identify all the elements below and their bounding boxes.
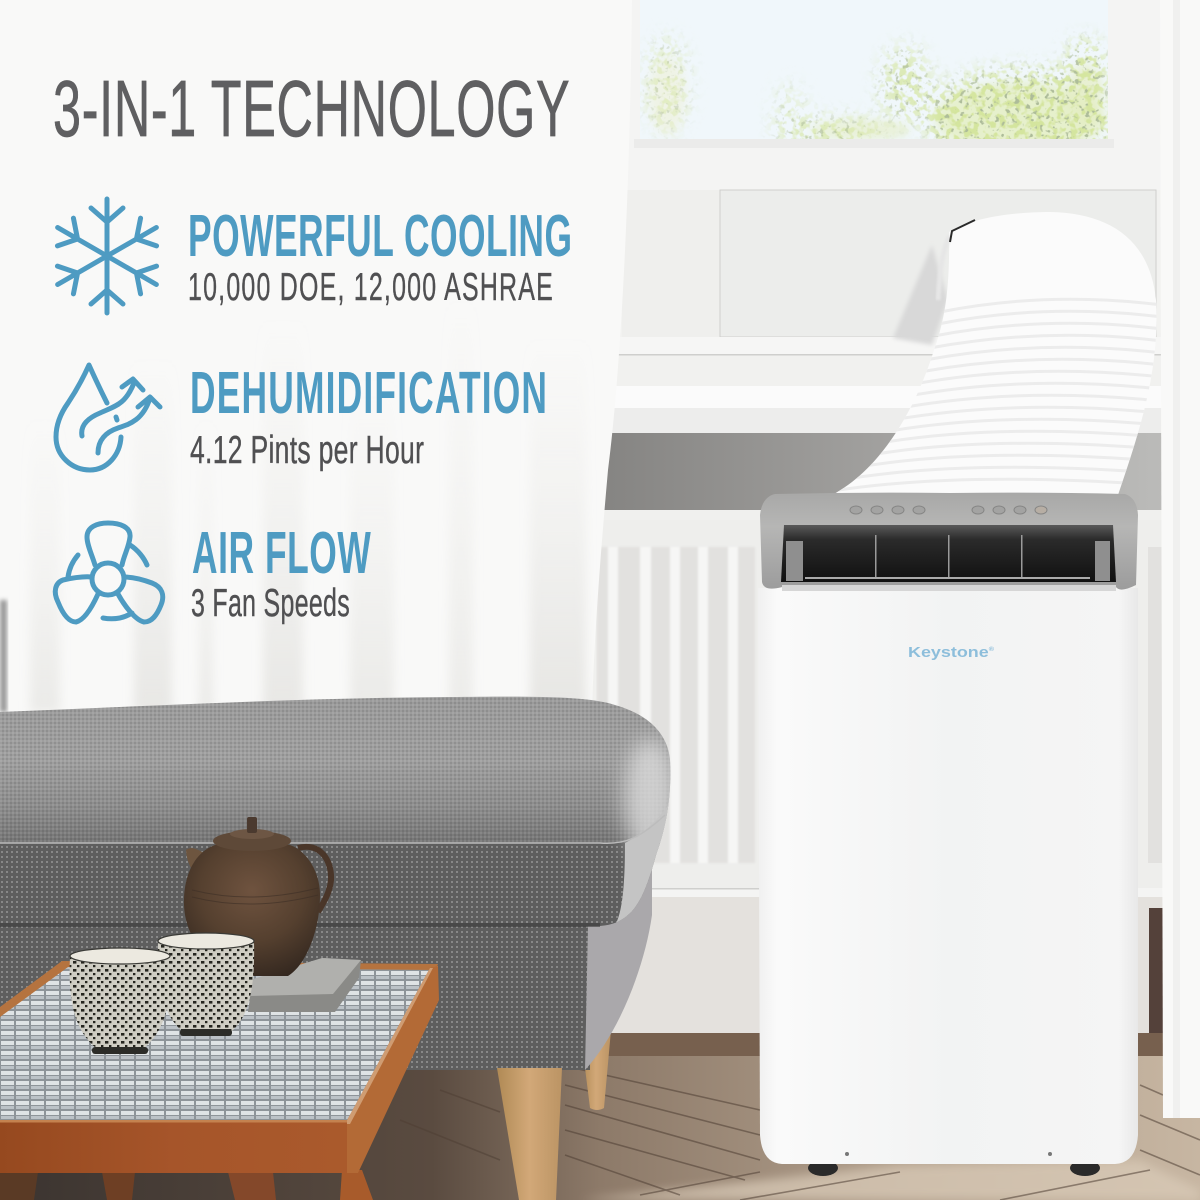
wheels	[808, 1160, 1100, 1176]
wooden floor	[0, 1056, 1200, 1200]
text: fan speeds: 3 Fan Speeds	[191, 580, 350, 624]
icon: snowflake	[50, 199, 164, 313]
back cup	[158, 933, 254, 1036]
title: 3-IN-1 TECHNOLOGY	[53, 64, 570, 154]
sofa back leg	[581, 1030, 611, 1110]
exhaust hose	[826, 212, 1170, 495]
feature: dehumidification	[56, 361, 547, 472]
portable air conditioner	[758, 493, 1138, 1176]
left curtain	[0, 0, 632, 712]
text: cooling capacity: 10,000 DOE, 12,000 ASHRAE	[188, 264, 553, 308]
right curtain	[1160, 0, 1200, 1118]
sofa front leg	[497, 1068, 562, 1200]
wall under the radiator	[590, 897, 1180, 1034]
heading: dehumidification: DEHUMIDIFICATION	[190, 361, 547, 426]
feature: powerful cooling	[50, 199, 572, 313]
control buttons	[850, 506, 1047, 514]
front cup	[70, 948, 170, 1054]
air vent	[781, 525, 1116, 582]
coffee table	[0, 961, 439, 1200]
radiator	[596, 510, 1178, 897]
icon: fan	[55, 523, 163, 622]
teapot	[184, 817, 331, 976]
pipe	[1149, 908, 1163, 1040]
heading: air flow: AIR FLOW	[192, 521, 371, 586]
sofa base	[0, 870, 652, 1070]
sofa top cushion	[0, 690, 680, 933]
sofa	[0, 690, 680, 1070]
brand logo: Keystone	[908, 644, 976, 661]
window sill	[608, 337, 1175, 433]
window panel insert	[622, 190, 1156, 338]
unit body	[758, 588, 1138, 1164]
heading: powerful cooling: POWERFUL COOLING	[188, 204, 572, 269]
icon: water drop with arrows	[56, 365, 160, 470]
table top mosaic	[0, 962, 438, 1122]
table legs	[0, 1170, 373, 1200]
top control panel	[760, 493, 1138, 591]
feature: air flow	[55, 521, 371, 624]
brand logo: ®	[989, 646, 995, 653]
baseboard	[555, 1033, 1195, 1058]
stone book	[248, 958, 361, 1012]
wall under the sill	[600, 433, 1175, 510]
hose shadow	[893, 245, 948, 345]
table wood rim	[0, 961, 438, 1017]
window with trees	[640, 0, 1108, 139]
text: pints per hour: 4.12 Pints per Hour	[190, 429, 424, 472]
